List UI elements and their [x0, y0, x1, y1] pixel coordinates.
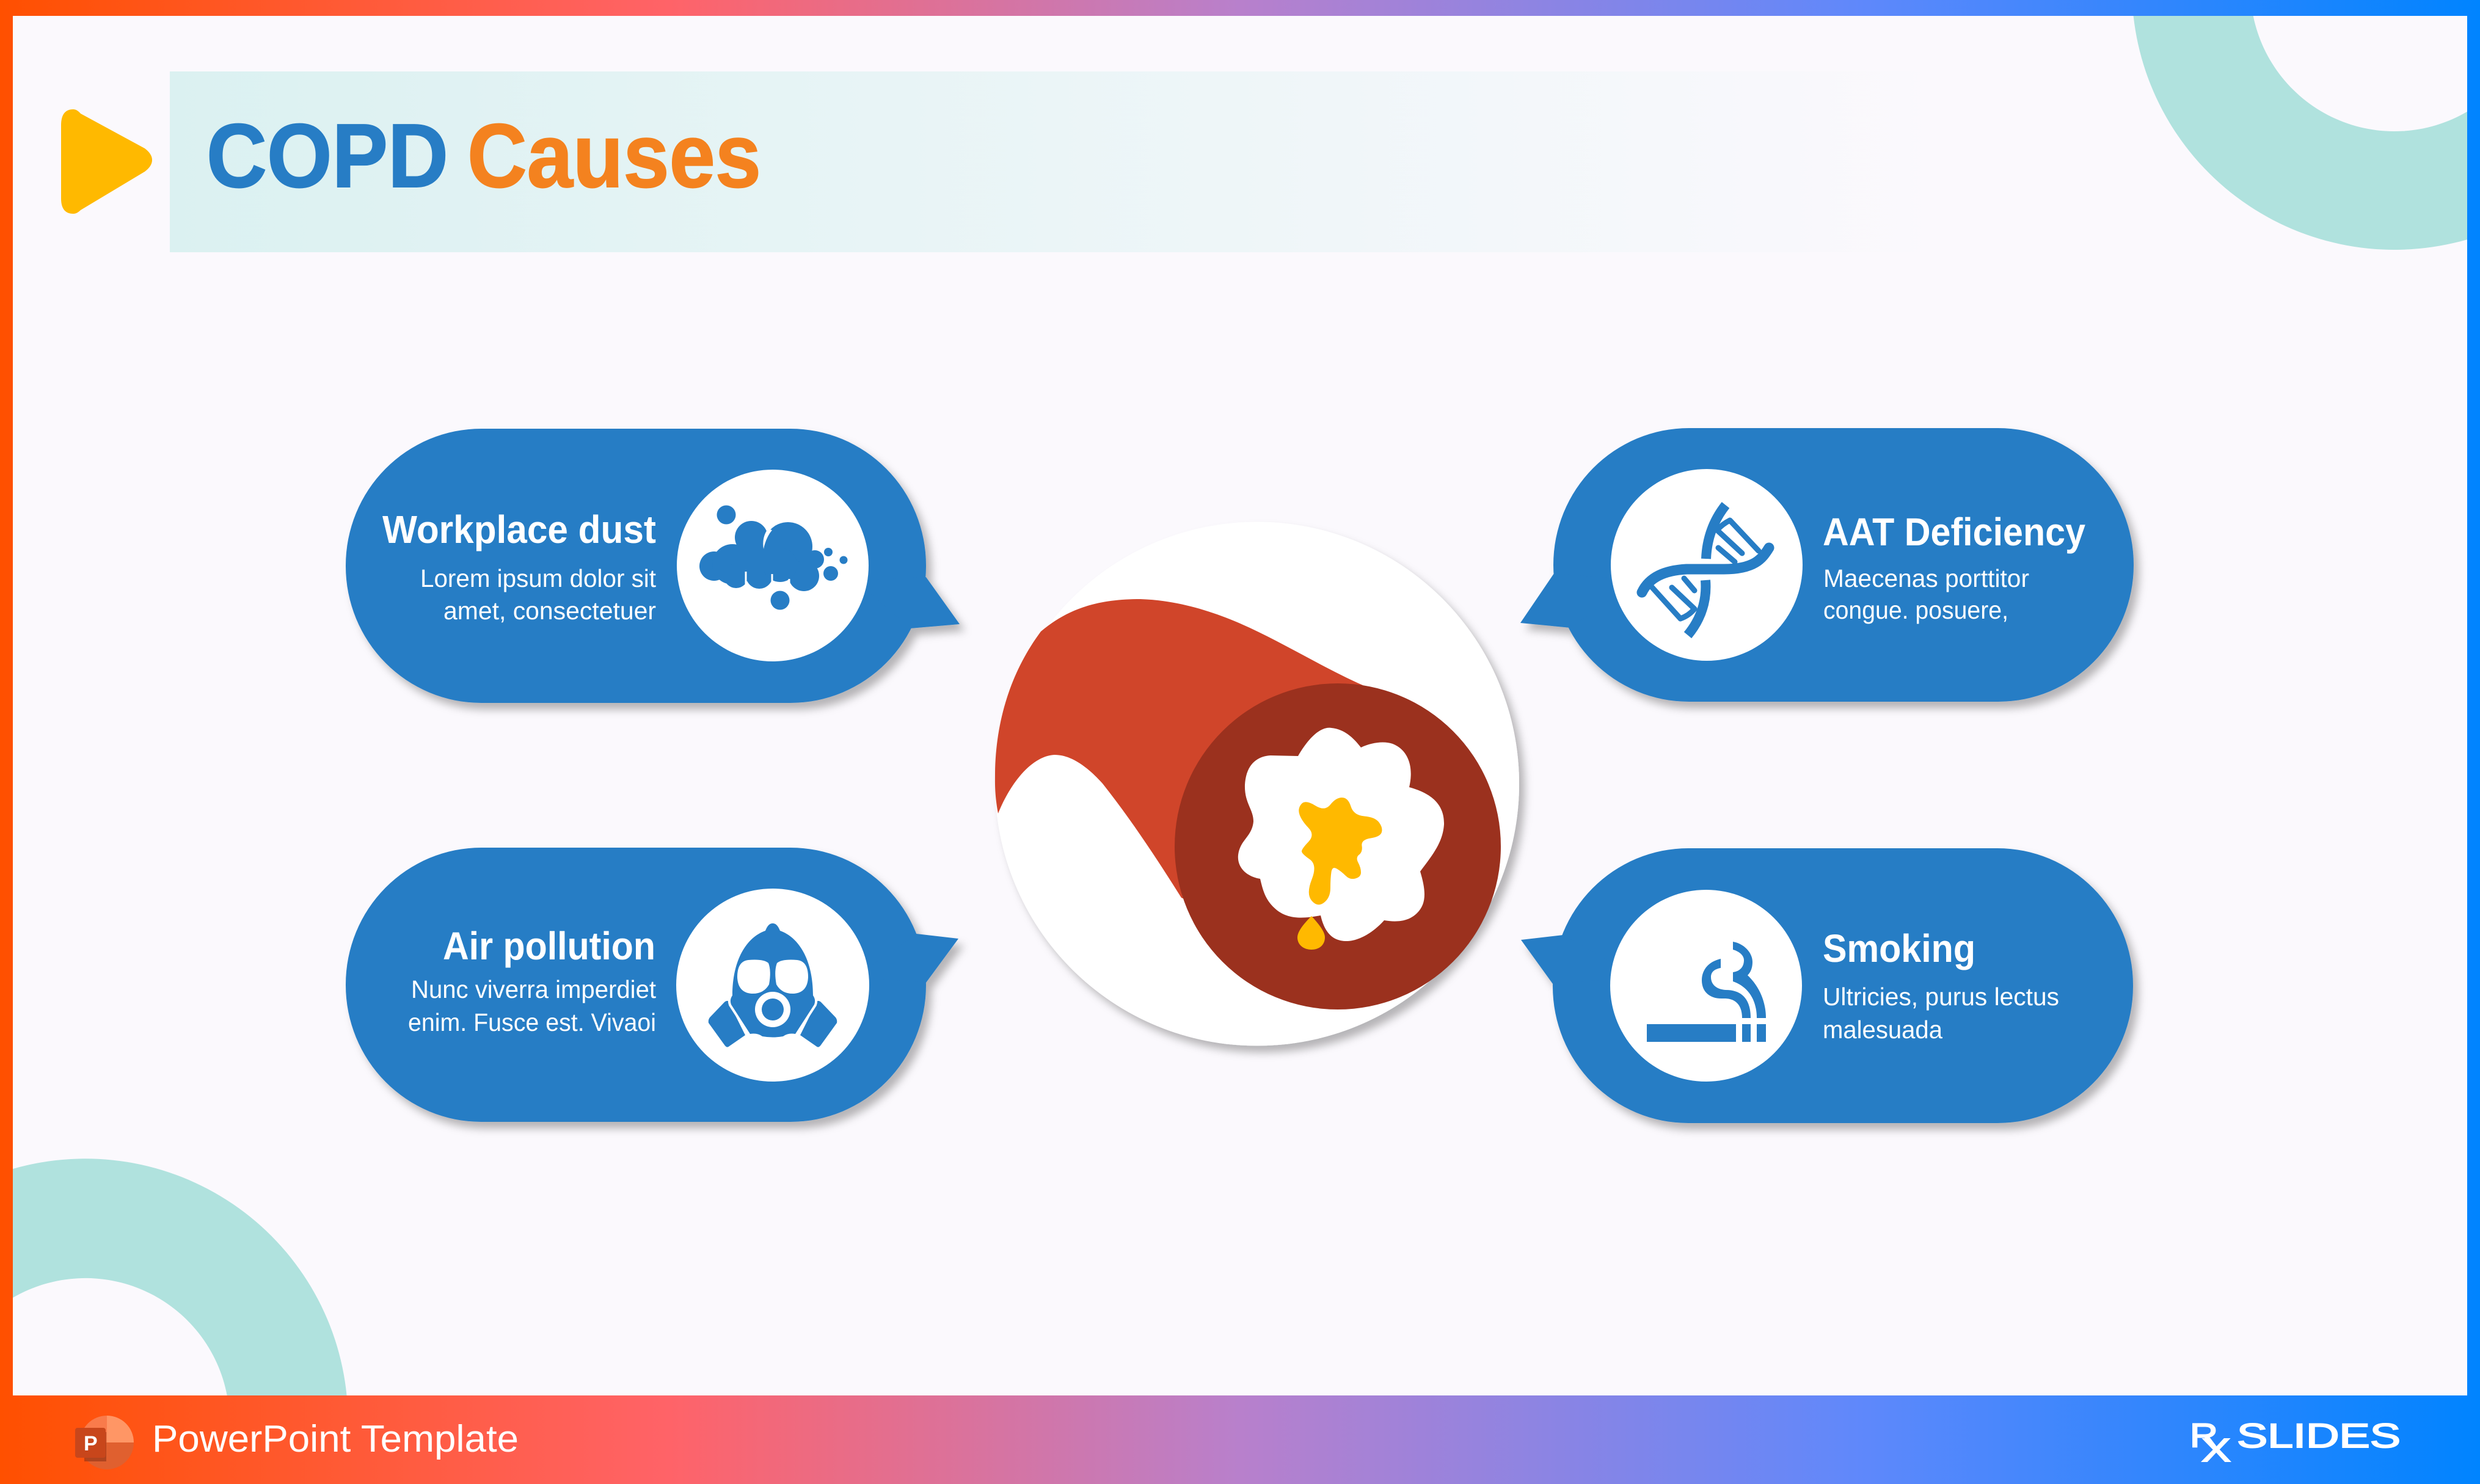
speech bubble [1521, 848, 2133, 1123]
heading: AAT Deficiency [1823, 510, 2085, 554]
airway cross section [1175, 683, 1501, 1009]
mucus drop [1297, 916, 1325, 950]
description: Maecenas porttitor [1823, 564, 2029, 592]
speech bubble [346, 429, 960, 703]
description [1823, 564, 2029, 624]
white circle [995, 522, 1519, 1046]
speech bubble [1520, 428, 2134, 702]
panel: central airway illustration [995, 522, 1519, 1046]
description: Ultricies, purus lectus [1823, 983, 2059, 1011]
panel: workplace dust [346, 429, 960, 703]
icon: PowerPoint logo [75, 1416, 134, 1469]
brand logo [2190, 1416, 2401, 1469]
open lumen [1238, 728, 1444, 941]
description: enim. Fusce est. Vivaoi [408, 1008, 656, 1036]
brand logo: SLIDES [2237, 1416, 2401, 1455]
description [420, 564, 657, 625]
panel: air pollution [346, 848, 958, 1122]
icon: dust cloud [677, 470, 869, 661]
icon: PowerPoint logo: P [84, 1432, 98, 1455]
icon: play arrow [61, 109, 152, 214]
description: malesuada [1823, 1016, 1942, 1044]
mucus splat [1299, 798, 1382, 904]
icon: cigarette [1610, 890, 1802, 1082]
icon: DNA helix [1611, 469, 1803, 661]
panel: smoking [1521, 848, 2133, 1123]
description: Nunc viverra imperdiet [411, 975, 657, 1003]
title [206, 106, 761, 206]
heading: Workplace dust [382, 507, 656, 551]
description: amet, consectetuer [443, 597, 656, 625]
description [408, 975, 657, 1036]
brand logo: X [2201, 1432, 2231, 1469]
title: Causes [467, 106, 761, 206]
decorative arc bottom left [13, 1158, 347, 1395]
title: COPD [206, 106, 448, 206]
speech bubble [346, 848, 958, 1122]
icon: gas mask [676, 889, 869, 1082]
panel: AAT deficiency [1520, 428, 2134, 702]
decorative arc top right [2134, 16, 2467, 250]
heading: Smoking [1823, 926, 1975, 970]
footer label: PowerPoint Template [152, 1418, 519, 1460]
description [1823, 983, 2059, 1044]
description: congue. posuere, [1823, 596, 2008, 624]
heading: Air pollution [443, 924, 655, 968]
title banner [170, 71, 1936, 252]
description: Lorem ipsum dolor sit [420, 564, 657, 592]
airway tube [995, 599, 1405, 916]
brand logo: R [2190, 1416, 2218, 1454]
